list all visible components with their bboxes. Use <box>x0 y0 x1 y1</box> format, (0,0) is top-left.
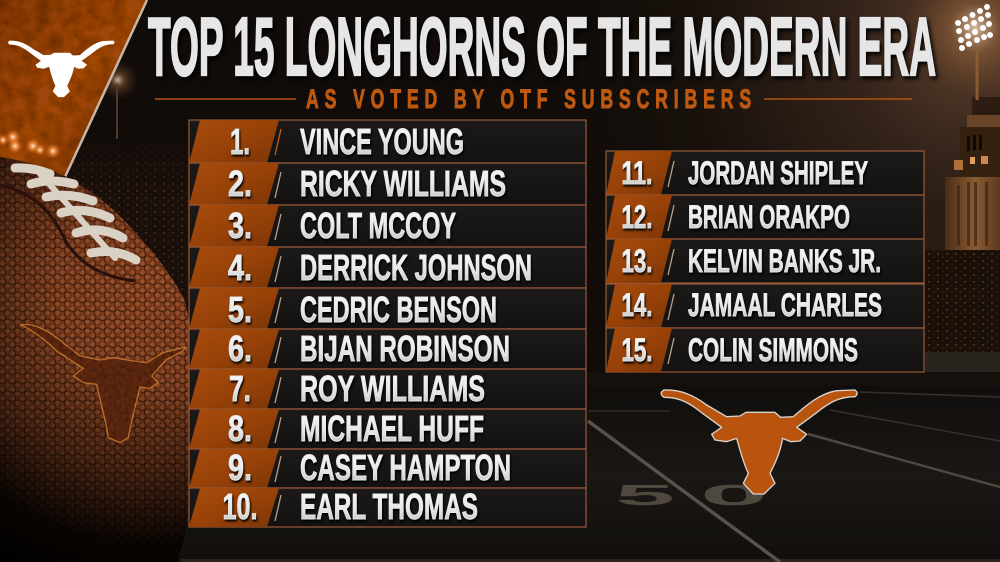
row 13: KELVIN BANKS JR. <box>688 243 881 279</box>
orange corner panel <box>0 0 147 177</box>
row 9 <box>189 447 586 488</box>
panel: ranks 11 to 15 <box>606 151 924 372</box>
row 4 <box>189 247 586 288</box>
row 1: 1. <box>230 121 250 162</box>
row 5: 5. <box>228 289 252 330</box>
field markings: 0 <box>700 480 768 512</box>
row 1: VINCE YOUNG <box>300 121 464 162</box>
floodlight <box>905 0 1000 100</box>
row 12: 12. <box>622 199 652 235</box>
row 5: CEDRIC BENSON <box>300 289 497 330</box>
row 12 <box>606 195 924 239</box>
subtitle: AS VOTED BY OTF SUBSCRIBERS <box>306 84 757 114</box>
row 8: 8. <box>228 408 252 449</box>
football <box>0 157 190 562</box>
row 11: 11. <box>622 155 652 191</box>
row 7: ROY WILLIAMS <box>300 368 485 409</box>
row 3: 3. <box>228 205 252 246</box>
row 10: 10. <box>222 486 258 527</box>
row 8: MICHAEL HUFF <box>300 408 484 449</box>
row 10 <box>189 486 586 527</box>
row 15: 15. <box>622 332 652 368</box>
icon: white longhorn logo <box>8 41 115 97</box>
clock tower <box>925 97 1000 250</box>
row 13 <box>606 239 924 283</box>
row 6: BIJAN ROBINSON <box>300 328 510 369</box>
small distant floodlight <box>98 60 138 139</box>
panel: ranks 1 to 10 <box>189 120 586 527</box>
row 5 <box>189 288 586 330</box>
icon: embossed longhorn on ball <box>20 324 186 443</box>
row 15 <box>606 328 924 372</box>
row 9: CASEY HAMPTON <box>300 447 511 488</box>
row 3 <box>189 205 586 247</box>
row 1 <box>189 120 586 163</box>
row 10: EARL THOMAS <box>300 486 478 527</box>
row 13: 13. <box>622 243 652 279</box>
row 14: JAMAAL CHARLES <box>688 287 882 323</box>
row 11 <box>606 151 924 195</box>
row 6: 6. <box>228 328 252 369</box>
row 14: 14. <box>622 287 652 323</box>
field markings: 5 <box>615 480 675 512</box>
row 9: 9. <box>228 447 252 488</box>
row 8 <box>189 408 586 449</box>
row 12: BRIAN ORAKPO <box>688 199 850 235</box>
field markings <box>588 392 1000 562</box>
row 4: 4. <box>228 247 252 288</box>
row 7: 7. <box>229 368 251 409</box>
row 15: COLIN SIMMONS <box>688 332 858 368</box>
row 11: JORDAN SHIPLEY <box>688 155 868 191</box>
icon: orange longhorn logo <box>661 390 857 494</box>
row 2: RICKY WILLIAMS <box>300 163 506 204</box>
row 2: 2. <box>228 163 252 204</box>
row 2 <box>189 163 586 205</box>
row 7 <box>189 368 586 409</box>
row 14 <box>606 284 924 328</box>
row 3: COLT MCCOY <box>300 205 456 246</box>
row 6 <box>189 328 586 369</box>
football laces <box>15 168 136 260</box>
row 4: DERRICK JOHNSON <box>300 247 532 288</box>
